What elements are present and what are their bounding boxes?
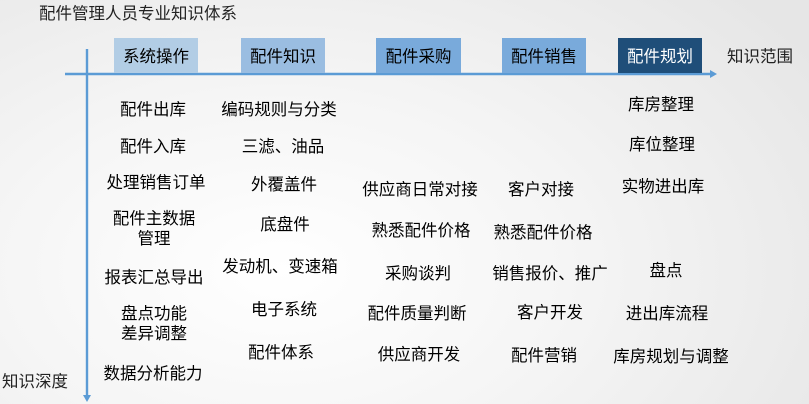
header: parts purchasing (376, 38, 461, 73)
column: parts purchasing: 供应商开发 (378, 346, 460, 364)
column: system operation: 报表汇总导出 (104, 269, 204, 287)
column: parts sales: 熟悉配件价格 (494, 224, 592, 242)
header: system operation: 系统操作 (123, 48, 189, 66)
header: parts purchasing: 配件采购 (386, 48, 452, 66)
column: parts planning: 库位整理 (629, 136, 695, 154)
header: parts knowledge: 配件知识 (250, 48, 316, 66)
vertical axis arrow: knowledge depth (83, 49, 91, 402)
axis label: knowledge range: 知识范围 (727, 48, 793, 66)
column: system operation: 配件出库 (120, 101, 186, 119)
axis label: knowledge depth: 知识深度 (2, 373, 68, 391)
column: parts sales: 客户对接 (508, 181, 574, 199)
column: parts purchasing: 熟悉配件价格 (372, 222, 470, 240)
column: parts sales: 配件营销 (511, 347, 577, 365)
header: parts planning: 配件规划 (627, 48, 693, 66)
column: parts planning (613, 96, 729, 366)
column: parts knowledge: 三滤、油品 (242, 138, 324, 156)
column: parts planning: 进出库流程 (626, 305, 708, 323)
column: parts planning: 库房整理 (628, 96, 694, 114)
column: parts planning: 库房规划与调整 (613, 348, 729, 366)
column: system operation: 盘点功能 (121, 305, 187, 323)
horizontal axis arrow: knowledge range (65, 70, 717, 78)
column: system operation: 管理 (138, 230, 170, 248)
column: parts purchasing: 采购谈判 (385, 265, 451, 283)
column: parts planning: 实物进出库 (622, 178, 704, 196)
column: system operation: 配件入库 (120, 138, 186, 156)
column: parts knowledge: 编码规则与分类 (221, 101, 337, 119)
column: parts knowledge: 发动机、变速箱 (222, 258, 338, 276)
column: system operation: 差异调整 (121, 325, 187, 343)
column: parts knowledge: 外覆盖件 (251, 176, 317, 194)
column: parts purchasing (362, 180, 478, 364)
header: parts sales (502, 38, 586, 73)
column: parts purchasing: 供应商日常对接 (362, 181, 478, 199)
title: 配件管理人员专业知识体系 (39, 5, 237, 23)
header: parts planning (618, 38, 702, 73)
header: parts sales: 配件销售 (511, 48, 577, 66)
column: parts knowledge: 配件体系 (248, 344, 314, 362)
column: parts sales (492, 180, 608, 365)
column: parts knowledge (221, 100, 338, 362)
column: parts knowledge: 底盘件 (260, 216, 310, 234)
header: parts knowledge (241, 38, 325, 73)
column: parts purchasing: 配件质量判断 (368, 305, 466, 323)
column: system operation (104, 101, 206, 383)
column: parts sales: 客户开发 (517, 304, 583, 322)
header: system operation (114, 38, 198, 73)
column: parts knowledge: 电子系统 (251, 301, 317, 319)
column: system operation: 配件主数据 (113, 210, 195, 228)
column: parts planning: 盘点 (650, 262, 682, 280)
column: system operation: 处理销售订单 (106, 174, 206, 192)
column: parts sales: 销售报价、推广 (492, 265, 608, 283)
column: system operation: 数据分析能力 (104, 365, 202, 383)
